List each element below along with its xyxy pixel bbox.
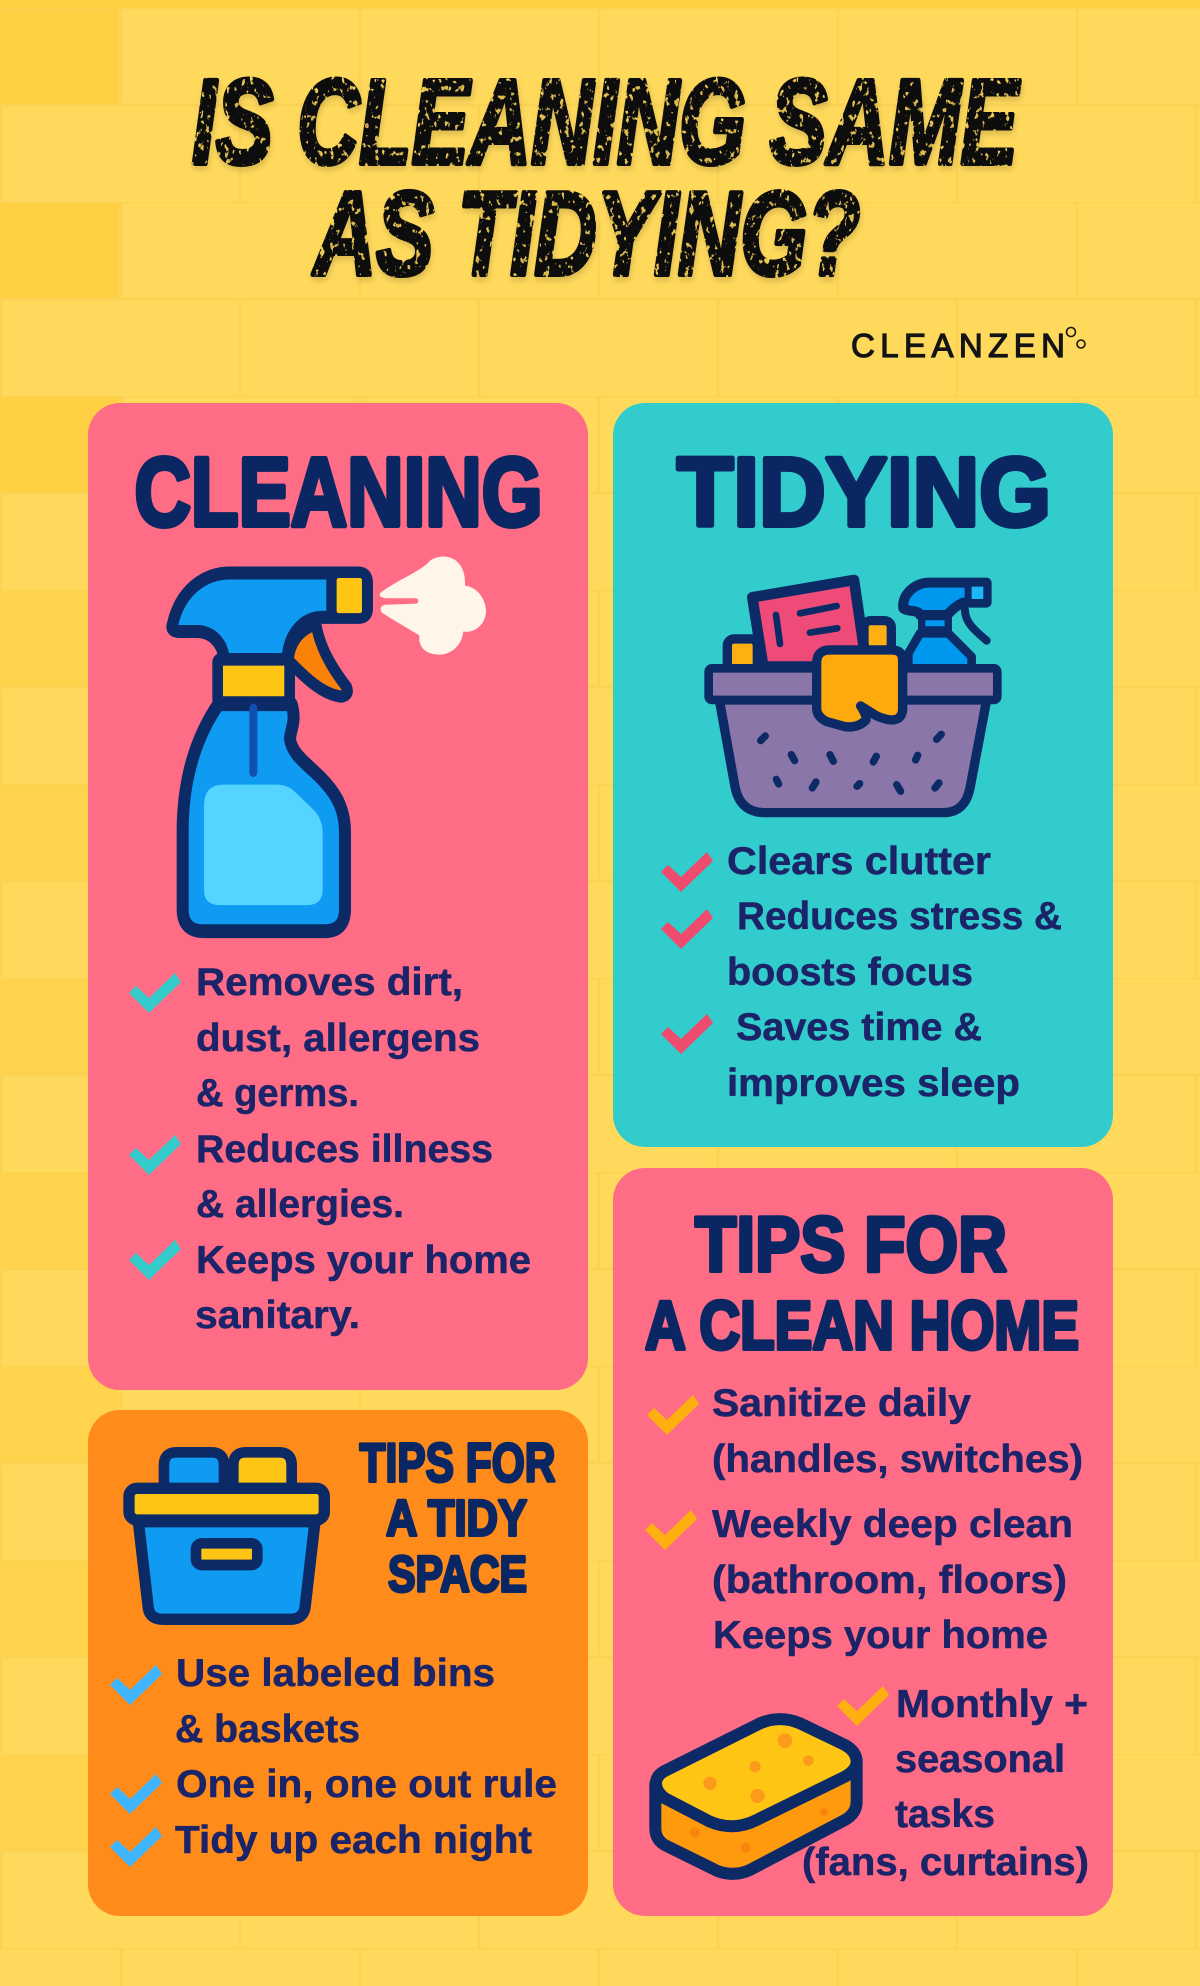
icon: storage bin bbox=[129, 1452, 324, 1619]
title: AS TIDYING? bbox=[312, 168, 860, 300]
heading: CLEANING: CLEANING bbox=[134, 438, 542, 546]
checklist: clean tips: Sanitize daily bbox=[712, 1382, 971, 1425]
heading: TIDYING: TIDYING bbox=[677, 438, 1051, 546]
clean tips panel background bbox=[613, 1168, 1113, 1916]
checklist: clean tips: Keeps your home bbox=[713, 1614, 1048, 1657]
checklist: clean tips bbox=[645, 1382, 1083, 1726]
checklist: cleaning benefits: sanitary. bbox=[195, 1294, 360, 1337]
logo: CLEANZEN: CLEANZEN bbox=[851, 327, 1065, 364]
checklist continued: monthly tasks: (fans, curtains) bbox=[802, 1841, 1089, 1884]
checklist: cleaning benefits: Keeps your home bbox=[196, 1239, 531, 1282]
checklist: cleaning benefits: Removes dirt, bbox=[196, 961, 463, 1004]
panel: tips for a clean home bbox=[613, 1168, 1113, 1916]
heading: TIPS FOR A CLEAN HOME bbox=[645, 1200, 1079, 1364]
panel: cleaning bbox=[88, 403, 588, 1390]
checklist: cleaning benefits: dust, allergens bbox=[196, 1017, 480, 1060]
tidying panel background bbox=[613, 403, 1113, 1147]
checklist: clean tips: (bathroom, floors) bbox=[712, 1559, 1067, 1602]
checklist: tidying benefits: boosts focus bbox=[727, 951, 973, 994]
heading: TIPS FOR A TIDY SPACE: SPACE bbox=[388, 1546, 527, 1602]
heading: TIPS FOR A CLEAN HOME: TIPS FOR bbox=[695, 1200, 1007, 1288]
checklist: cleaning benefits: & germs. bbox=[196, 1072, 359, 1115]
checklist: tidying benefits bbox=[661, 840, 1062, 1105]
checklist: tidying benefits: Saves time & bbox=[736, 1006, 982, 1049]
checklist continued: monthly tasks bbox=[802, 1683, 1089, 1884]
cleaning panel background bbox=[88, 403, 588, 1390]
icon: spray bottle bbox=[172, 556, 486, 931]
checklist: clean tips: Weekly deep clean bbox=[712, 1503, 1073, 1546]
checklist: tidying benefits: improves sleep bbox=[727, 1062, 1020, 1105]
heading: TIPS FOR A TIDY SPACE bbox=[360, 1432, 556, 1602]
icon: sponge bbox=[655, 1719, 857, 1874]
checklist continued: monthly tasks: seasonal bbox=[895, 1738, 1065, 1781]
checklist: tidy tips: & baskets bbox=[175, 1708, 360, 1751]
checklist: tidy tips: Tidy up each night bbox=[175, 1819, 532, 1862]
checklist: tidying benefits: Reduces stress & bbox=[737, 895, 1062, 938]
title bbox=[192, 54, 1020, 300]
heading: TIPS FOR A CLEAN HOME: A CLEAN HOME bbox=[645, 1287, 1079, 1364]
checklist: cleaning benefits: & allergies. bbox=[196, 1183, 404, 1226]
checklist continued: monthly tasks: Monthly + bbox=[896, 1683, 1088, 1726]
checklist: tidying benefits: Clears clutter bbox=[727, 840, 991, 883]
tidy tips panel background bbox=[88, 1410, 588, 1916]
checklist continued: monthly tasks: tasks bbox=[895, 1793, 995, 1836]
checklist: tidy tips: Use labeled bins bbox=[176, 1652, 495, 1695]
checklist: cleaning benefits bbox=[129, 961, 531, 1337]
panel: tips for a tidy space bbox=[88, 1410, 588, 1916]
icon: basket with supplies bbox=[709, 580, 997, 813]
panel: tidying bbox=[613, 403, 1113, 1147]
heading: TIPS FOR A TIDY SPACE: A TIDY bbox=[386, 1490, 527, 1546]
checklist: cleaning benefits: Reduces illness bbox=[196, 1128, 493, 1171]
checklist: tidy tips bbox=[110, 1652, 557, 1867]
checklist: tidy tips: One in, one out rule bbox=[176, 1763, 557, 1806]
checklist: clean tips: (handles, switches) bbox=[712, 1438, 1083, 1481]
heading: TIPS FOR A TIDY SPACE: TIPS FOR bbox=[360, 1432, 556, 1494]
